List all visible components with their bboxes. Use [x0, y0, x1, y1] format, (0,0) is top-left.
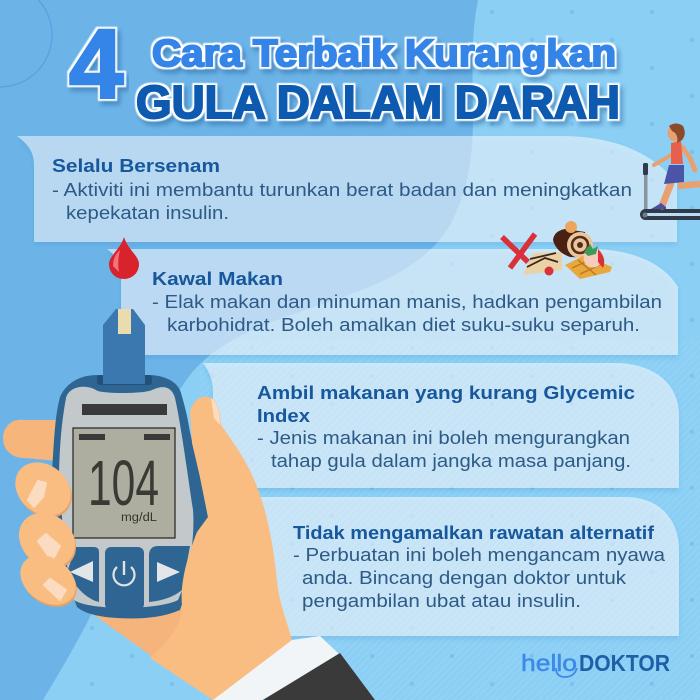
waffle and strawberry [565, 244, 612, 279]
panel: rawatan alternatif [235, 497, 679, 636]
reading: 104 [88, 447, 159, 519]
heading [257, 382, 635, 426]
panel: Kawal Makan [107, 249, 678, 355]
test strip [103, 309, 145, 386]
icon: runner on treadmill [640, 124, 700, 220]
body text: - Elak makan dan minuman manis, hadkan pengambilan [152, 292, 662, 312]
slice of cake [523, 252, 562, 276]
chocolate roll [553, 221, 593, 258]
panel: Selalu Bersenam [17, 136, 677, 242]
logo: hello [521, 650, 577, 676]
unit: mg/dL [121, 512, 158, 524]
heading: Kawal Makan [152, 268, 283, 289]
power button [105, 547, 144, 610]
meter face [59, 387, 193, 608]
title line 2: GULA DALAM DARAH [136, 76, 620, 128]
finger 2 [8, 502, 87, 580]
meter body [52, 375, 208, 618]
body text: - Aktiviti ini membantu turunkan berat badan dan meningkatkan [52, 180, 632, 200]
title numeral: 4 [69, 9, 124, 119]
heading: Ambil makanan yang kurang Glycemic [257, 382, 635, 403]
body text [257, 428, 631, 471]
blood glucose meter [52, 309, 208, 618]
body text: kepekatan insulin. [66, 203, 229, 223]
hand: thumb and palm [150, 397, 292, 700]
left button [67, 547, 99, 602]
title line 1: Cara Terbaik Kurangkan [152, 33, 616, 75]
hand: index finger behind meter [3, 420, 70, 462]
body text: tahap gula dalam jangka masa panjang. [271, 451, 631, 471]
logo: DOKTOR [579, 650, 670, 676]
red cross [502, 234, 535, 268]
icon: blood drop [109, 237, 139, 279]
shirt cuff [213, 636, 340, 700]
jacket sleeve [263, 653, 375, 700]
body text: pengambilan ubat atau insulin. [302, 591, 581, 611]
finger 3 [11, 545, 86, 617]
socket [97, 375, 152, 385]
top label bar [82, 404, 167, 415]
body text [293, 545, 666, 611]
heading: Tidak mengamalkan rawatan alternatif [293, 522, 655, 543]
finger 1 [5, 451, 82, 529]
body text [152, 292, 662, 335]
title [69, 9, 620, 128]
heading: Index [257, 405, 311, 426]
thumb nail [211, 398, 220, 425]
icon: sweet food [502, 221, 612, 279]
body text: karbohidrat. Boleh amalkan diet suku-suku separuh. [167, 315, 640, 335]
right button [149, 546, 190, 602]
heading: Selalu Bersenam [52, 155, 220, 176]
body text: anda. Bincang dengan doktor untuk [302, 568, 627, 588]
body text: - Jenis makanan ini boleh mengurangkan [257, 428, 630, 448]
hand: palm behind meter [90, 560, 300, 700]
logo [521, 650, 670, 677]
panel: Glycemic Index [203, 363, 679, 488]
body text [52, 180, 632, 223]
body text: - Perbuatan ini boleh mengancam nyawa [293, 545, 666, 565]
display [73, 428, 175, 538]
